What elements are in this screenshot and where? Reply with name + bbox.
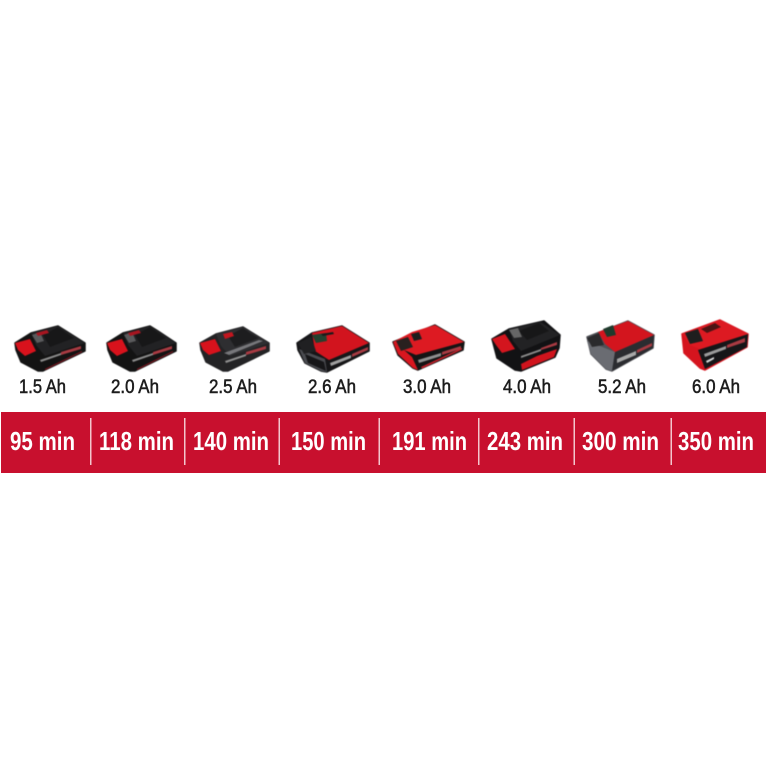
- panel: runtime band: [1, 412, 766, 473]
- battery row: [15, 320, 748, 372]
- capacity labels: [19, 376, 740, 398]
- label: 2.5 Ah: 2.5 Ah: [209, 376, 257, 398]
- icon: 2.0 Ah battery: [107, 326, 176, 371]
- label: 2.0 Ah: 2.0 Ah: [111, 376, 159, 398]
- value: 118 min: 118 min: [99, 426, 174, 456]
- value: 95 min: 95 min: [10, 426, 75, 456]
- value: 150 min: 150 min: [291, 426, 366, 456]
- icon: 2.6 Ah battery: [297, 326, 369, 372]
- label: 5.2 Ah: 5.2 Ah: [598, 376, 646, 398]
- value: 191 min: 191 min: [392, 426, 467, 456]
- icon: 5.2 Ah battery: [587, 321, 654, 371]
- icon: 6.0 Ah battery: [682, 320, 748, 370]
- value: 300 min: 300 min: [582, 426, 659, 456]
- label: 6.0 Ah: 6.0 Ah: [692, 376, 740, 398]
- label: 2.6 Ah: 2.6 Ah: [308, 376, 356, 398]
- icon: 2.5 Ah battery: [200, 327, 269, 371]
- value: 243 min: 243 min: [487, 426, 563, 456]
- icon: 3.0 Ah battery: [393, 325, 464, 370]
- label: 1.5 Ah: 1.5 Ah: [19, 376, 66, 398]
- icon: 4.0 Ah battery: [492, 321, 560, 371]
- label: 3.0 Ah: 3.0 Ah: [403, 376, 451, 398]
- value: 140 min: 140 min: [193, 426, 269, 456]
- label: 4.0 Ah: 4.0 Ah: [503, 376, 551, 398]
- icon: 1.5 Ah battery: [15, 326, 85, 371]
